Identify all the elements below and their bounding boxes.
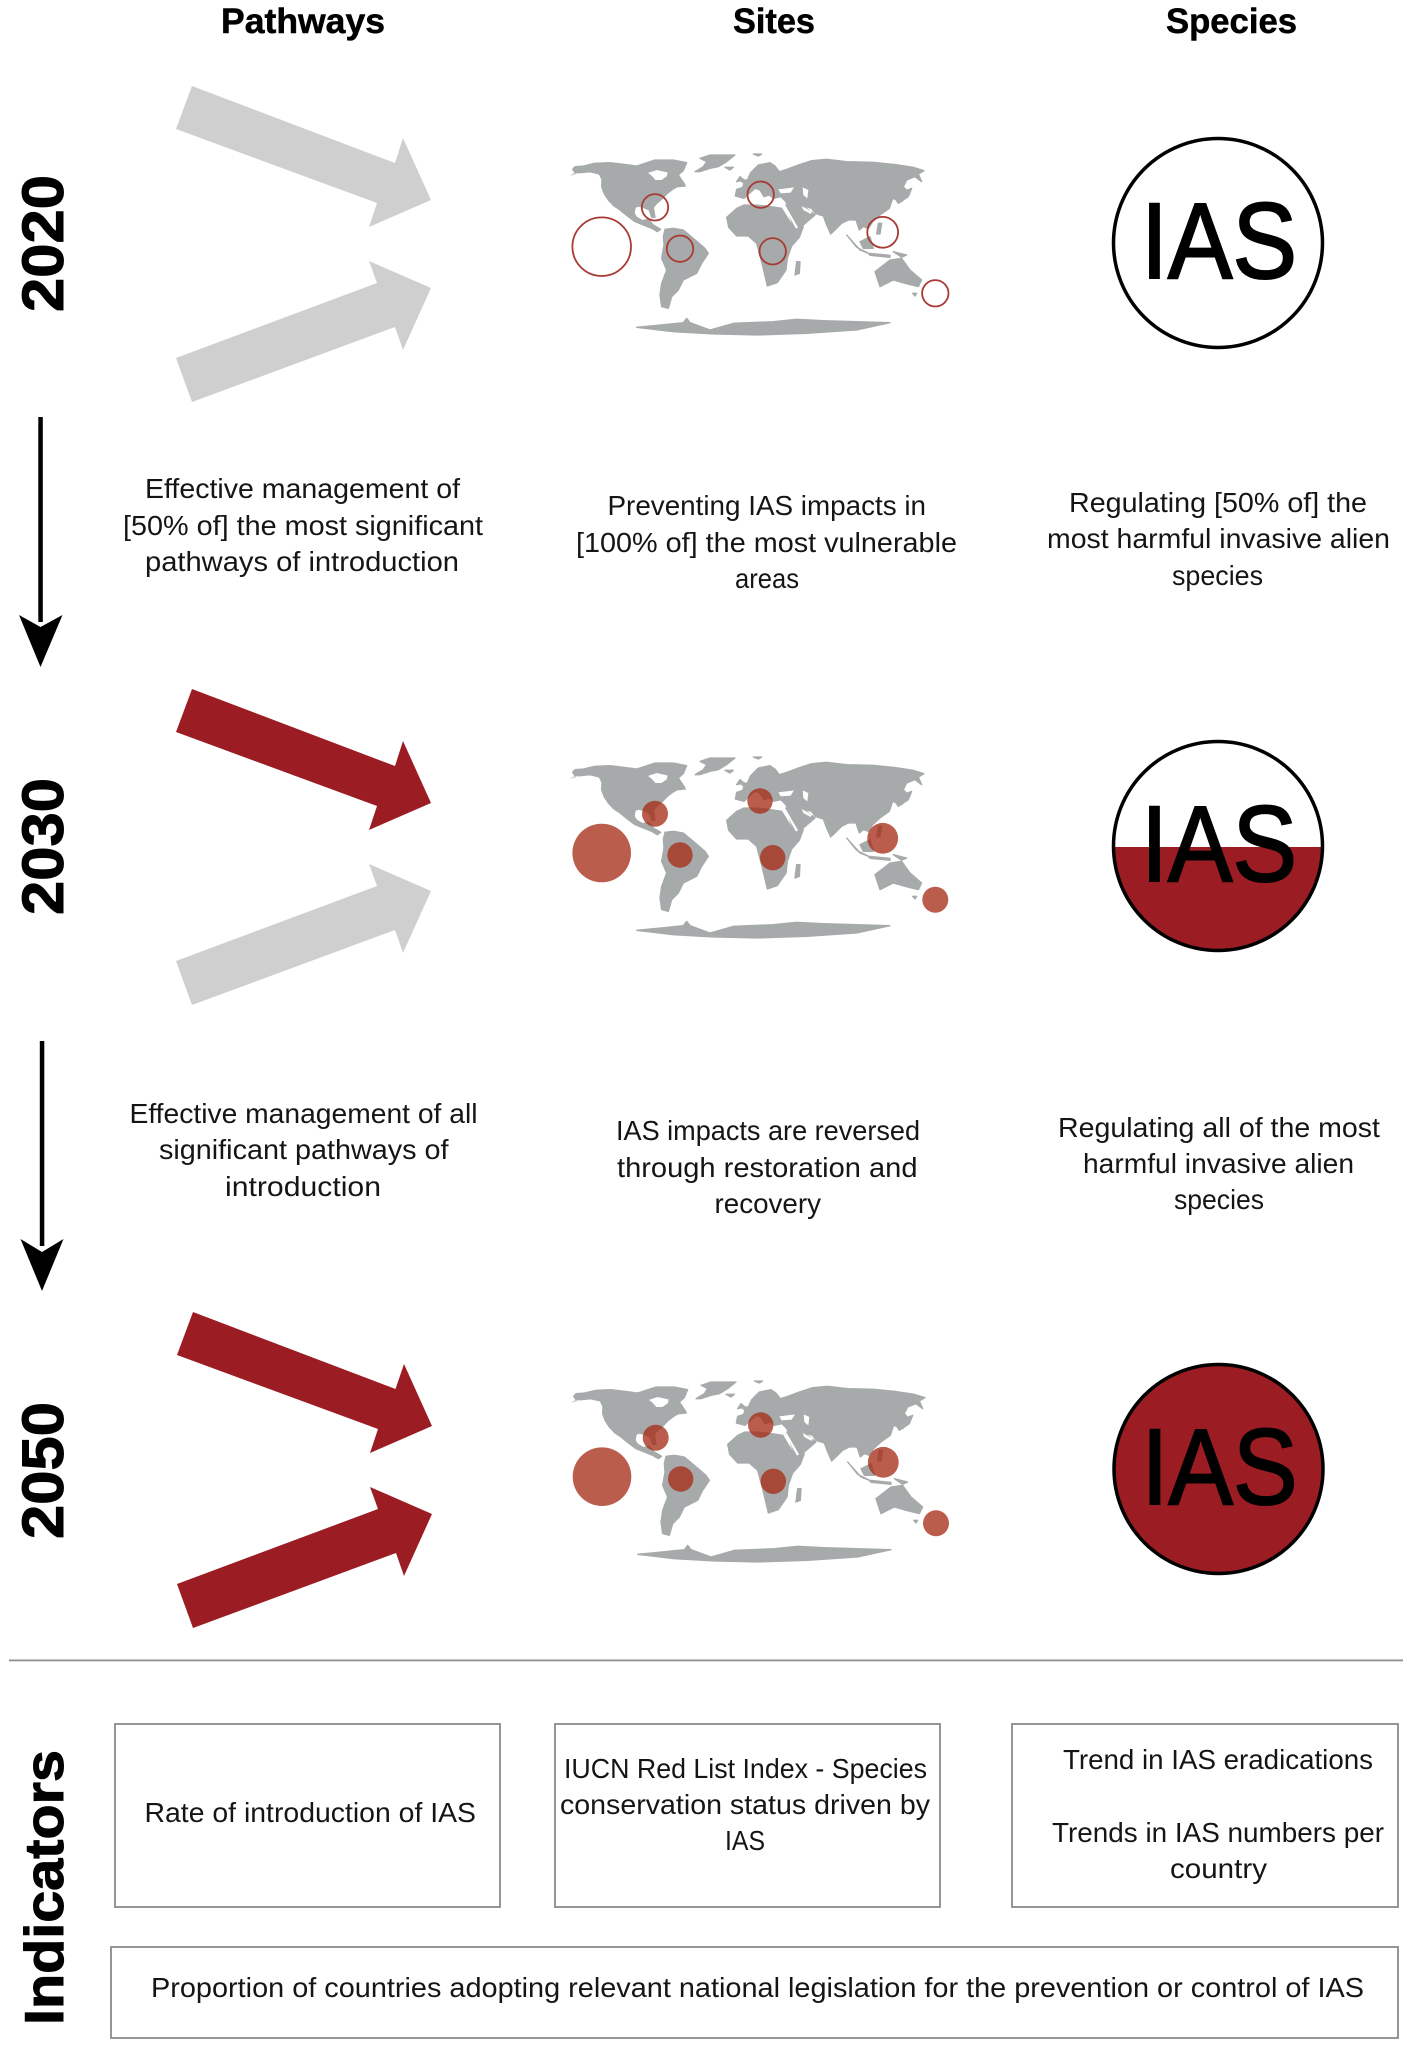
- indicator box: species: [1012, 1724, 1398, 1907]
- pathways target 2030: Effective management of: [145, 473, 460, 504]
- indicator box: sites: IUCN Red List Index - Species: [564, 1753, 927, 1784]
- timeline arrow 2020 to 2030: [19, 417, 62, 667]
- indicator box: national legislation: Proportion of countries adopting relevant national legislation for the prevention or control of IAS: [151, 1972, 1364, 2003]
- year label: 2030: 2030: [11, 778, 76, 915]
- indicator box: species: country: [1170, 1853, 1267, 1884]
- column heading: Pathways: Pathways: [221, 2, 385, 41]
- sites target 2030: Preventing IAS impacts in: [608, 490, 926, 521]
- species circle 2030: half filled: [1114, 742, 1322, 951]
- species target 2050: harmful invasive alien: [1083, 1148, 1354, 1179]
- sites target 2050: recovery: [714, 1188, 821, 1219]
- species target 2030: most harmful invasive alien: [1047, 523, 1390, 554]
- species circle 2020: empty: IAS: [1141, 180, 1297, 301]
- species target 2030: species: [1172, 560, 1263, 591]
- column heading: Sites: Sites: [733, 2, 815, 41]
- species circle 2050: fully filled: IAS: [1142, 1406, 1298, 1527]
- indicator box: species: Trend in IAS eradications: [1063, 1744, 1373, 1775]
- world map 2050 with filled sites: [570, 1381, 949, 1562]
- section label: Indicators: Indicators: [13, 1750, 75, 2025]
- indicator box: sites: [555, 1724, 940, 1907]
- species circle 2030: half filled: IAS: [1141, 783, 1297, 904]
- sites target 2050: IAS impacts are reversed: [616, 1115, 920, 1146]
- sites target 2030: [576, 490, 957, 594]
- world map 2020 with outlined sites: [569, 154, 948, 335]
- indicator box: species: Trends in IAS numbers per: [1052, 1817, 1384, 1848]
- indicator box: pathways: Rate of introduction of IAS: [144, 1797, 476, 1828]
- species target 2030: [1047, 487, 1390, 591]
- pathway arrows 2050: both red: [177, 1312, 432, 1628]
- species target 2030: Regulating [50% of] the: [1069, 487, 1367, 518]
- species target 2050: species: [1174, 1184, 1264, 1215]
- indicator box: sites: IAS: [725, 1825, 765, 1856]
- sites target 2050: [616, 1115, 920, 1219]
- pathways target 2050: introduction: [225, 1171, 381, 1202]
- pathways target 2030: [50% of] the most significant: [123, 510, 483, 541]
- pathways target 2050: Effective management of all: [130, 1098, 478, 1129]
- year label: 2050: 2050: [11, 1402, 76, 1539]
- sites target 2030: [100% of] the most vulnerable: [576, 527, 957, 558]
- indicator box: sites: conservation status driven by: [560, 1789, 930, 1820]
- species target 2050: [1058, 1112, 1380, 1215]
- year label: 2020: 2020: [11, 175, 76, 312]
- pathways target 2050: [130, 1098, 478, 1202]
- pathway arrows 2020: both grey: [176, 86, 431, 402]
- indicator box: pathways: [115, 1724, 500, 1907]
- species target 2050: Regulating all of the most: [1058, 1112, 1380, 1143]
- species circle 2050: fully filled: [1114, 1364, 1323, 1574]
- timeline arrow 2030 to 2050: [20, 1041, 64, 1291]
- indicator box: national legislation: [111, 1947, 1398, 2038]
- pathways target 2030: [123, 473, 483, 577]
- sites target 2050: through restoration and: [617, 1152, 918, 1183]
- pathways target 2030: pathways of introduction: [145, 546, 459, 577]
- column heading: Species: Species: [1166, 2, 1297, 41]
- world map 2030 with filled sites: [569, 757, 948, 938]
- pathway arrows 2030: one red, one grey: [176, 689, 431, 1005]
- pathways target 2050: significant pathways of: [159, 1134, 449, 1165]
- sites target 2030: areas: [735, 563, 799, 594]
- species circle 2020: empty: [1114, 138, 1322, 348]
